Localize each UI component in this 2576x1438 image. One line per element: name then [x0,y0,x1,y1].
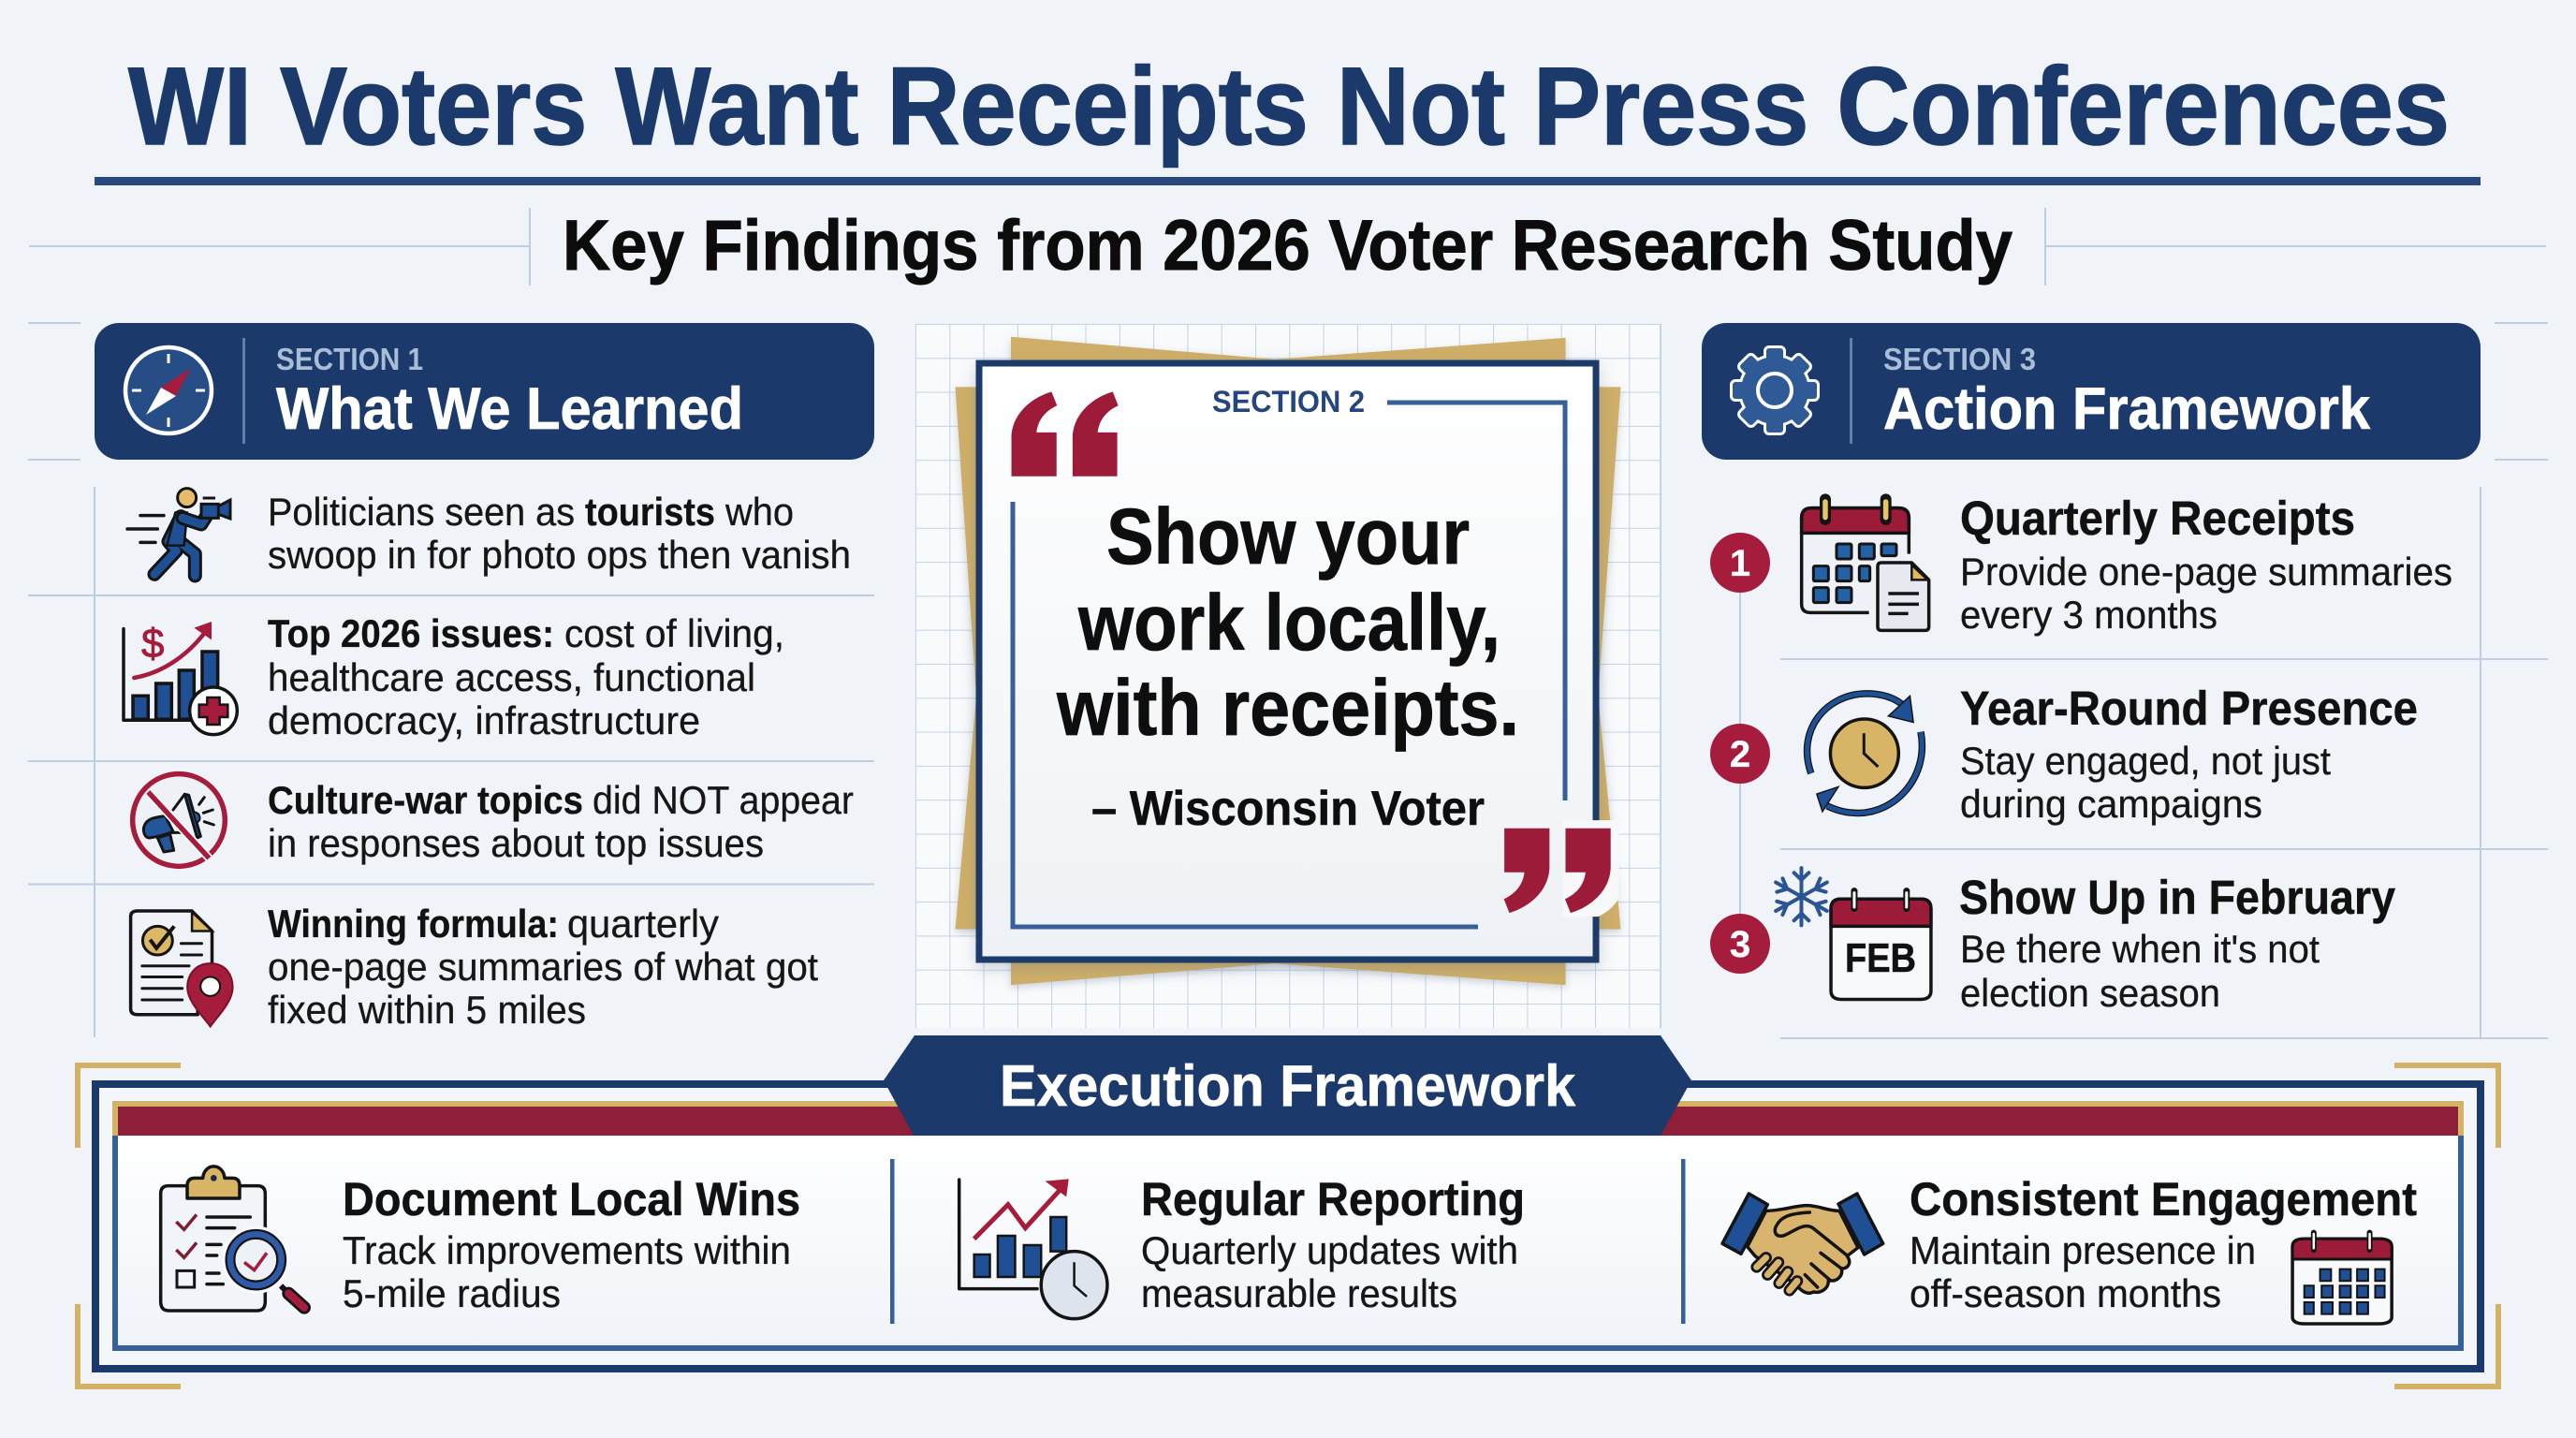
action 2: year-round presence [1710,682,2418,826]
panel: section 3 action framework [1702,323,2548,1038]
inner panel [115,1136,2461,1348]
action 3: show up in february: election season [1960,971,2220,1015]
item: document local wins [161,1167,800,1315]
quote mark: closing [1504,820,1618,917]
icon: compass [125,347,212,433]
section 1 header: SECTION 1 [276,342,423,376]
finding: tourists: Politicians seen as [268,490,575,534]
item: consistent engagement: Maintain presence in [1910,1228,2256,1272]
panel: section 2 quote [915,324,1661,1028]
finding: winning formula [131,902,818,1032]
icon: no megaphone [133,774,225,866]
finding: culture war: in responses about top issues [268,821,764,865]
icon: calendar and document [1802,499,1929,630]
number badge 3 [1710,914,1770,974]
section 3 header: Action Framework [1883,376,2371,442]
section 1 header [95,323,874,460]
quote mark: opening [1012,391,1119,477]
action 1: quarterly receipts: Quarterly Receipts [1960,492,2355,545]
finding: top issues: healthcare access, functional [268,655,755,699]
finding: culture war: Culture-war topics [268,778,583,822]
finding: winning formula: fixed within 5 miles [268,988,586,1032]
section 1 header: What We Learned [276,376,743,442]
action 2: year-round presence: Stay engaged, not just [1960,739,2331,783]
item: document local wins: Track improvements within [343,1228,791,1272]
action 1: quarterly receipts: Provide one-page summaries [1960,550,2452,594]
finding: culture war [133,774,854,866]
item: consistent engagement: Consistent Engagement [1910,1173,2417,1225]
icon label: dollar sign: $ [141,621,164,667]
action 1: quarterly receipts [1710,492,2452,637]
panel: section 1 what we learned [28,323,874,1037]
icon: handshake [1722,1194,1883,1293]
quote card [979,363,1618,960]
banner [884,1035,1691,1136]
number badge 1: 1 [1730,543,1750,584]
panel: execution framework [78,1035,2498,1387]
action 1: quarterly receipts: every 3 months [1960,593,2217,637]
icon: month calendar [2292,1233,2392,1324]
icon: gear [1733,348,1817,433]
icon: snowflake and February calendar: FEB [1845,935,1916,981]
finding: tourists: tourists [585,490,715,534]
finding: tourists: who [724,490,794,534]
action 2: year-round presence: during campaigns [1960,782,2262,826]
finding: tourists: swoop in for photo ops then vanish [268,533,851,577]
action 3: show up in february: Be there when it's not [1960,927,2320,971]
subtitle: Key Findings from 2026 Voter Research Study [563,206,2012,286]
item: regular reporting: Quarterly updates with [1141,1228,1518,1272]
icon: chart with clock [959,1179,1107,1319]
item: document local wins: Document Local Wins [343,1173,800,1225]
gold corner brackets [78,1065,2498,1387]
section 3 header [1702,323,2481,460]
finding: top issues: Top 2026 issues: [268,611,554,655]
icon: photographer [127,489,230,576]
quote text: with receipts. [1056,664,1519,752]
item: regular reporting: measurable results [1141,1271,1457,1315]
finding: winning formula: quarterly [567,902,719,946]
icon: chart with health cross [124,622,237,735]
item: regular reporting: Regular Reporting [1141,1173,1525,1225]
action 3: show up in february [1710,868,2396,1015]
icon: snowflake and February calendar [1776,868,1931,999]
finding: top issues: cost of living, [564,611,784,655]
finding: winning formula: Winning formula: [268,902,559,946]
gold and red band [112,1101,2464,1136]
number badge 2 [1710,724,1770,784]
icon: clipboard with magnifier [161,1167,304,1311]
action 3: show up in february: Show Up in February [1959,871,2396,924]
attribution: – Wisconsin Voter [1091,782,1485,836]
finding: top issues: democracy, infrastructure [268,698,700,742]
title rule [95,177,2481,185]
subtitle [29,206,2546,286]
number badge 1 [1710,533,1770,593]
quote text: Show your [1106,492,1470,580]
number badge 3: 3 [1730,924,1750,965]
icon: clock with cycle arrows [1808,694,1922,813]
finding: winning formula: one-page summaries of what got [268,945,818,989]
item: consistent engagement [1722,1173,2417,1324]
quote text: work locally, [1077,579,1500,667]
finding: top issues [124,611,784,742]
finding: culture war: did NOT appear [593,778,854,822]
item: document local wins: 5-mile radius [343,1271,561,1315]
item: consistent engagement: off-season months [1910,1271,2221,1315]
outer frame [95,1084,2481,1369]
number badge 2: 2 [1730,734,1750,775]
gold paper layers [956,337,1620,985]
action 2: year-round presence: Year-Round Presence [1960,682,2418,735]
finding: tourists [127,489,851,577]
quote card: SECTION 2 [1212,385,1365,418]
item: regular reporting [959,1173,1525,1319]
icon: document with location pin [131,911,233,1027]
banner: Execution Framework [1000,1054,1575,1119]
section 3 header: SECTION 3 [1883,342,2036,376]
quote text [1056,492,1519,752]
